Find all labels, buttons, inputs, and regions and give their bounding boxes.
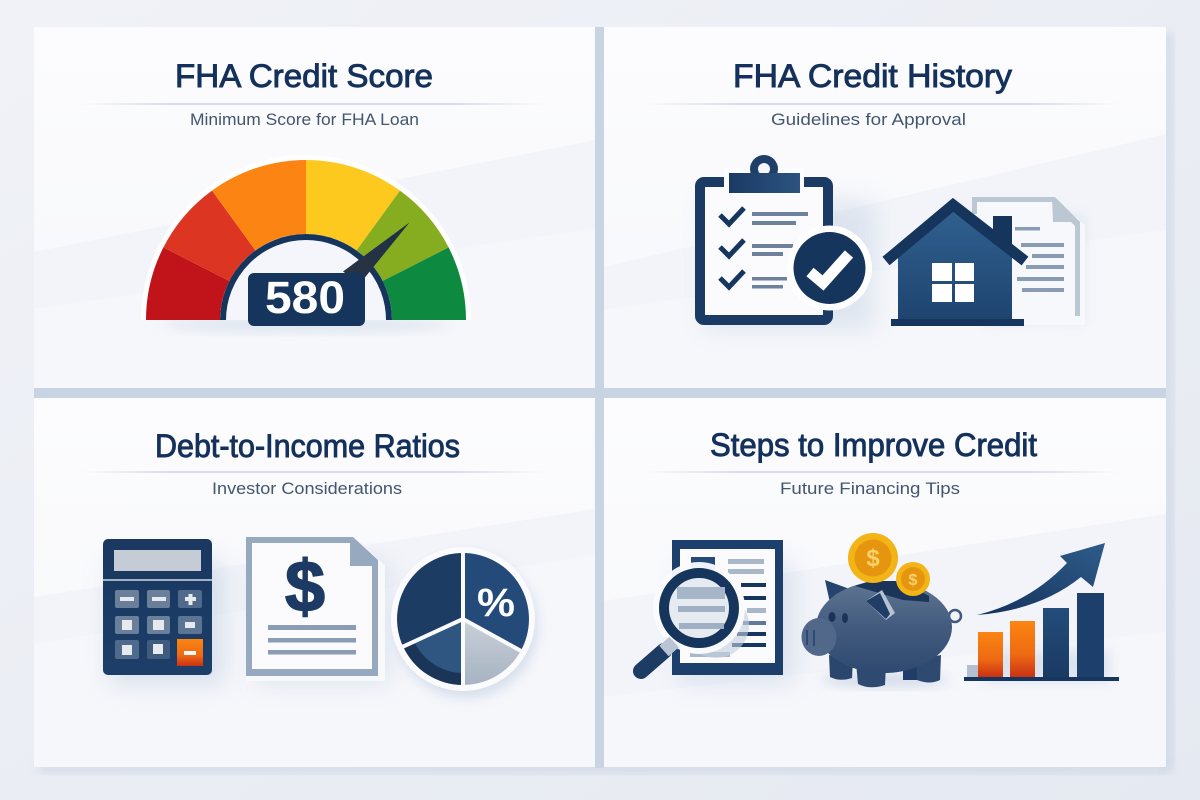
subtitle: Minimum Score for FHA Loan (190, 110, 419, 129)
title: FHA Credit History (733, 58, 1012, 94)
icon: calculator (103, 539, 225, 685)
percent sign: % (477, 581, 515, 625)
subtitle: Guidelines for Approval (771, 110, 966, 129)
icon: dollar document (246, 537, 390, 685)
subtitle: Investor Considerations (212, 479, 402, 498)
icon: magnifying glass (641, 562, 745, 671)
title: Debt-to-Income Ratios (155, 428, 460, 464)
dollar sign: $ (285, 547, 325, 627)
gauge chart (141, 155, 471, 332)
icon: piggy bank (802, 533, 961, 687)
icon: gold coins (848, 533, 930, 596)
icon: house (886, 205, 1025, 326)
panel: FHA Credit History (604, 27, 1166, 388)
panel: Steps to Improve Credit (604, 398, 1166, 767)
subtitle: Future Financing Tips (780, 479, 960, 498)
score badge: 580 (265, 272, 345, 323)
panel: Debt-to-Income Ratios (34, 398, 595, 767)
icon: gold coins: $ (866, 545, 880, 572)
icon: percent pie chart (391, 547, 538, 698)
icon: report under magnifier (641, 540, 795, 685)
title: Steps to Improve Credit (710, 427, 1037, 463)
icon: approval check badge (787, 226, 872, 310)
panel: FHA Credit Score (34, 27, 595, 388)
score badge (248, 272, 365, 326)
icon: growth bar chart with arrow (964, 543, 1119, 682)
icon: document behind house (972, 197, 1085, 325)
title: FHA Credit Score (175, 58, 433, 94)
icon: clipboard checklist (700, 155, 875, 330)
icon: gold coins: $ (909, 572, 918, 589)
gauge needle (343, 222, 410, 284)
